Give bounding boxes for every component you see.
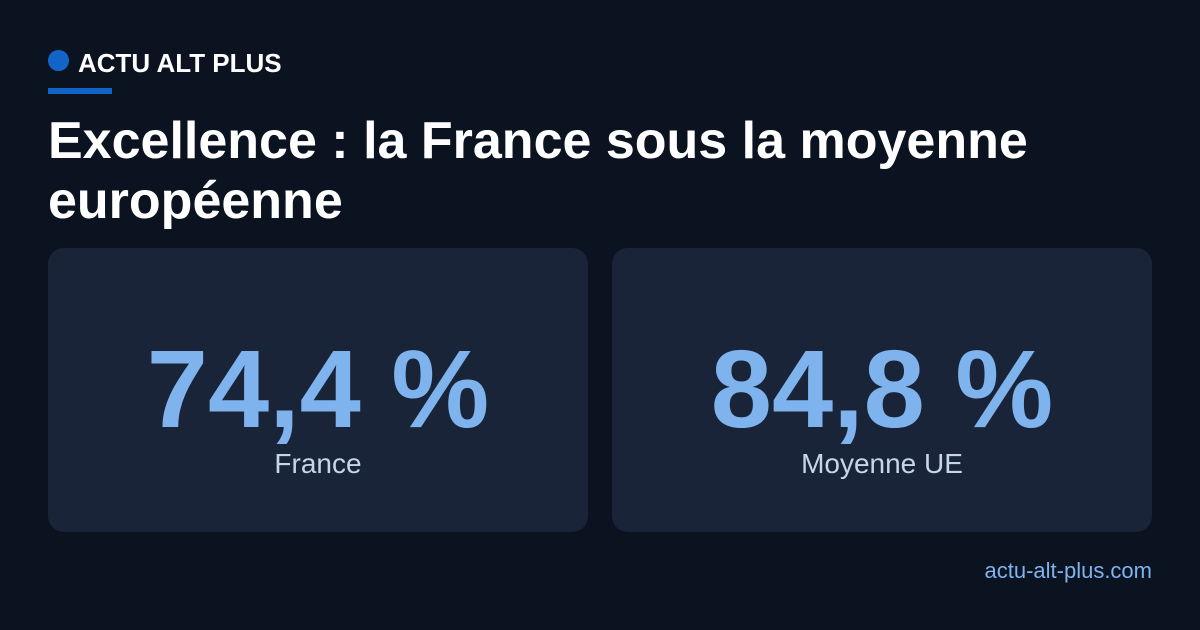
panel: France [48, 248, 588, 532]
title [48, 112, 1028, 230]
label: France: France [274, 448, 362, 479]
title: Excellence : la France sous la moyenne [48, 112, 1028, 170]
value: France: 74,4 % [147, 328, 489, 451]
brand underline [48, 88, 112, 94]
value: Moyenne UE: 84,8 % [711, 328, 1053, 451]
label: Moyenne UE: Moyenne UE [801, 448, 963, 479]
icon: brand dot [48, 50, 68, 70]
title: européenne [48, 172, 343, 230]
brand name: ACTU ALT PLUS [78, 48, 282, 78]
panel: Moyenne UE [612, 248, 1152, 532]
source link: actu-alt-plus.com [984, 558, 1152, 583]
brand header [48, 48, 282, 94]
